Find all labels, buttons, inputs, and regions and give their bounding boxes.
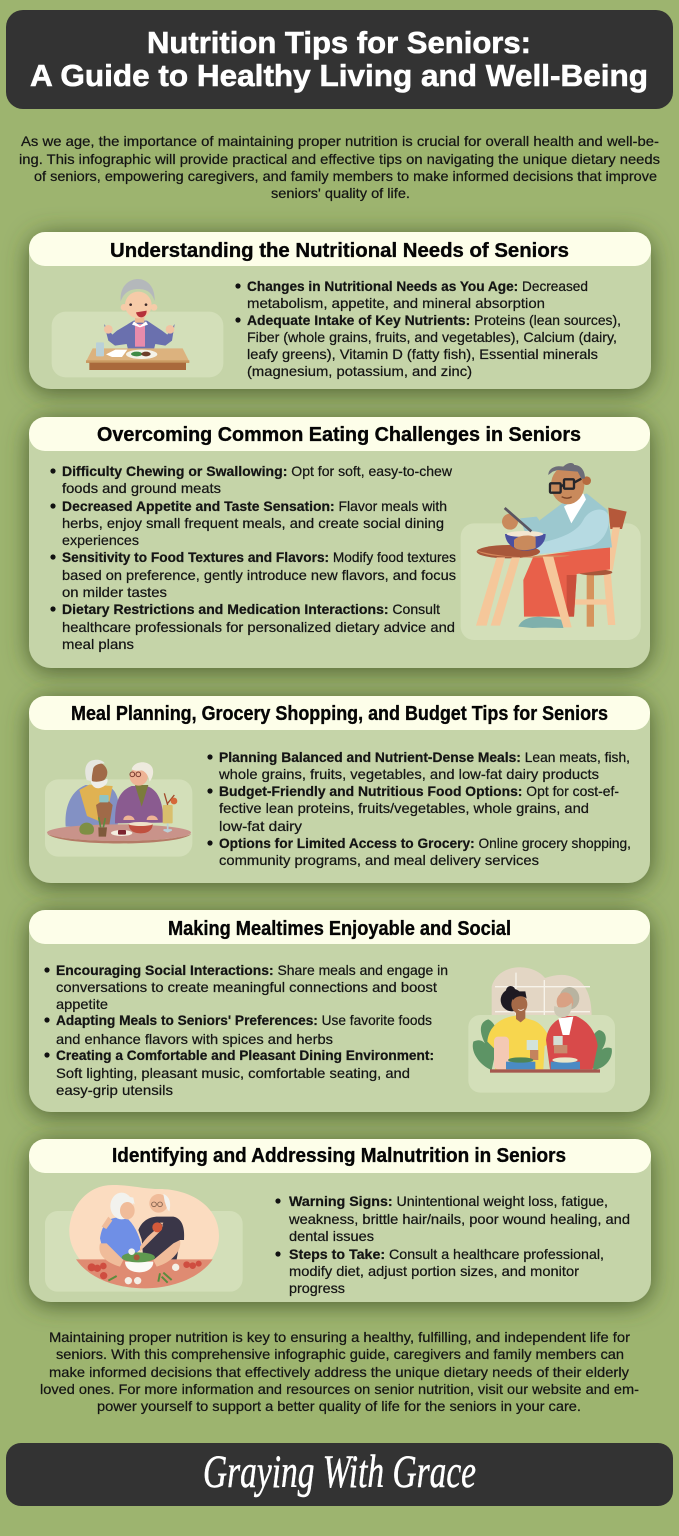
bullet list: on milder tastes xyxy=(62,585,167,600)
bullet list: and enhance flavors with spices and herbs xyxy=(56,1032,333,1047)
panel: overcoming eating challenges xyxy=(29,417,650,668)
bullet list: Encouraging Social Interactions: Share meals and engage in xyxy=(56,963,448,978)
bullet list: herbs, enjoy small frequent meals, and create social dining xyxy=(62,516,444,531)
bullet list: metabolism, appetite, and mineral absorption xyxy=(247,296,545,311)
panel heading xyxy=(29,1139,651,1173)
bullet list: experiences xyxy=(62,533,139,548)
bullet list: Adequate Intake of Key Nutrients: Proteins (lean sources), xyxy=(247,313,621,328)
bullet list: Adapting Meals to Seniors' Preferences: Use favorite foods xyxy=(56,1013,432,1028)
bullet list xyxy=(235,279,621,379)
closing text: make informed decisions that effectively address the unique dietary needs of their elderly xyxy=(49,1365,629,1380)
panel: understanding nutritional needs xyxy=(29,232,651,389)
illustration: couple sharing a meal xyxy=(468,967,615,1093)
bullet list: Difficulty Chewing or Swallowing: Opt for soft, easy-to-chew xyxy=(62,464,452,479)
illustration: senior couple dining xyxy=(45,760,192,857)
panel heading xyxy=(29,696,650,730)
bullet list: Dietary Restrictions and Medication Interactions: Consult xyxy=(62,602,440,617)
bullet list xyxy=(50,464,456,652)
bullet list: Options for Limited Access to Grocery: Online grocery shopping, xyxy=(219,836,631,851)
bullet list: meal plans xyxy=(62,637,134,652)
panel: identifying malnutrition xyxy=(29,1139,651,1302)
bullet list: community programs, and meal delivery services xyxy=(219,853,539,868)
bullet list: Fiber (whole grains, fruits, and vegetables), Calcium (dairy, xyxy=(247,330,617,345)
bullet list: leafy greens), Vitamin D (fatty fish), Essential minerals xyxy=(247,347,598,362)
intro text: ing. This infographic will provide practical and effective tips on navigating the unique dietary needs xyxy=(19,152,660,167)
panel: enjoyable and social mealtimes xyxy=(29,910,650,1112)
bullet list: Creating a Comfortable and Pleasant Dining Environment: xyxy=(56,1048,434,1063)
bullet list: Soft lighting, pleasant music, comfortable seating, and xyxy=(56,1066,410,1081)
bullet list: based on preference, gently introduce new flavors, and focus xyxy=(62,568,456,583)
intro text: seniors' quality of life. xyxy=(271,186,410,201)
bullet list: Budget-Friendly and Nutritious Food Options: Opt for cost-ef- xyxy=(219,784,619,799)
bullet list: Warning Signs: Unintentional weight loss, fatigue, xyxy=(289,1194,608,1209)
panel heading xyxy=(29,910,650,944)
panel: meal planning and budget xyxy=(29,696,650,883)
title banner: A Guide to Healthy Living and Well-Being xyxy=(30,58,648,93)
panel heading: Making Mealtimes Enjoyable and Social xyxy=(168,918,511,940)
bullet list: Planning Balanced and Nutrient-Dense Meals: Lean meats, fish, xyxy=(219,750,630,765)
bullet list: low-fat dairy xyxy=(219,819,302,834)
bullet list: appetite xyxy=(56,997,108,1012)
illustration: couple with salad xyxy=(45,1185,243,1292)
bullet list: healthcare professionals for personalized dietary advice and xyxy=(62,620,455,635)
intro text: of seniors, empowering caregivers, and family members to make informed decisions that improve xyxy=(34,169,657,184)
panel heading: Identifying and Addressing Malnutrition in Seniors xyxy=(112,1145,566,1167)
bullet list: easy-grip utensils xyxy=(56,1083,173,1098)
bullet list: conversations to create meaningful connections and boost xyxy=(56,980,437,995)
footer banner xyxy=(6,1443,673,1506)
bullet list: Decreased Appetite and Taste Sensation: Flavor meals with xyxy=(62,499,447,514)
bullet list: Steps to Take: Consult a healthcare professional, xyxy=(289,1247,604,1262)
bullet list: foods and ground meats xyxy=(62,481,221,496)
closing text: power yourself to support a better quality of life for the seniors in your care. xyxy=(97,1399,581,1414)
bullet list: progress xyxy=(289,1281,345,1296)
bullet list xyxy=(207,750,631,868)
panel heading: Overcoming Common Eating Challenges in Seniors xyxy=(97,424,581,446)
closing text: seniors. With this comprehensive infographic guide, caregivers and family members can xyxy=(56,1347,624,1362)
bullet list xyxy=(275,1194,630,1296)
closing text xyxy=(40,1330,639,1414)
illustration: man eating at table xyxy=(461,463,641,640)
closing text: loved ones. For more information and resources on senior nutrition, visit our website and em- xyxy=(40,1382,639,1397)
bullet list: modify diet, adjust portion sizes, and monitor xyxy=(289,1264,579,1279)
bullet list: Changes in Nutritional Needs as You Age: Decreased xyxy=(247,279,588,294)
illustration: senior woman at table xyxy=(52,279,223,377)
title banner xyxy=(6,10,673,109)
bullet list: weakness, brittle hair/nails, poor wound healing, and xyxy=(288,1212,630,1227)
panel heading: Meal Planning, Grocery Shopping, and Budget Tips for Seniors xyxy=(71,703,608,725)
closing text: Maintaining proper nutrition is key to ensuring a healthy, fulfilling, and independent life for xyxy=(49,1330,631,1345)
bullet list: whole grains, fruits, vegetables, and low-fat dairy products xyxy=(218,767,599,782)
intro text xyxy=(19,134,660,201)
intro text: As we age, the importance of maintaining proper nutrition is crucial for overall health and well-be- xyxy=(21,134,659,149)
bullet list: fective lean proteins, fruits/vegetables, whole grains, and xyxy=(219,801,589,816)
panel heading xyxy=(29,417,650,451)
bullet list: Sensitivity to Food Textures and Flavors: Modify food textures xyxy=(62,550,456,565)
panel heading xyxy=(29,232,651,266)
brand name: Graying With Grace xyxy=(203,1446,476,1498)
bullet list: (magnesium, potassium, and zinc) xyxy=(247,364,472,379)
panel heading: Understanding the Nutritional Needs of Seniors xyxy=(110,240,569,262)
bullet list: dental issues xyxy=(289,1229,374,1244)
title banner: Nutrition Tips for Seniors: xyxy=(147,25,531,60)
bullet list xyxy=(44,963,448,1098)
